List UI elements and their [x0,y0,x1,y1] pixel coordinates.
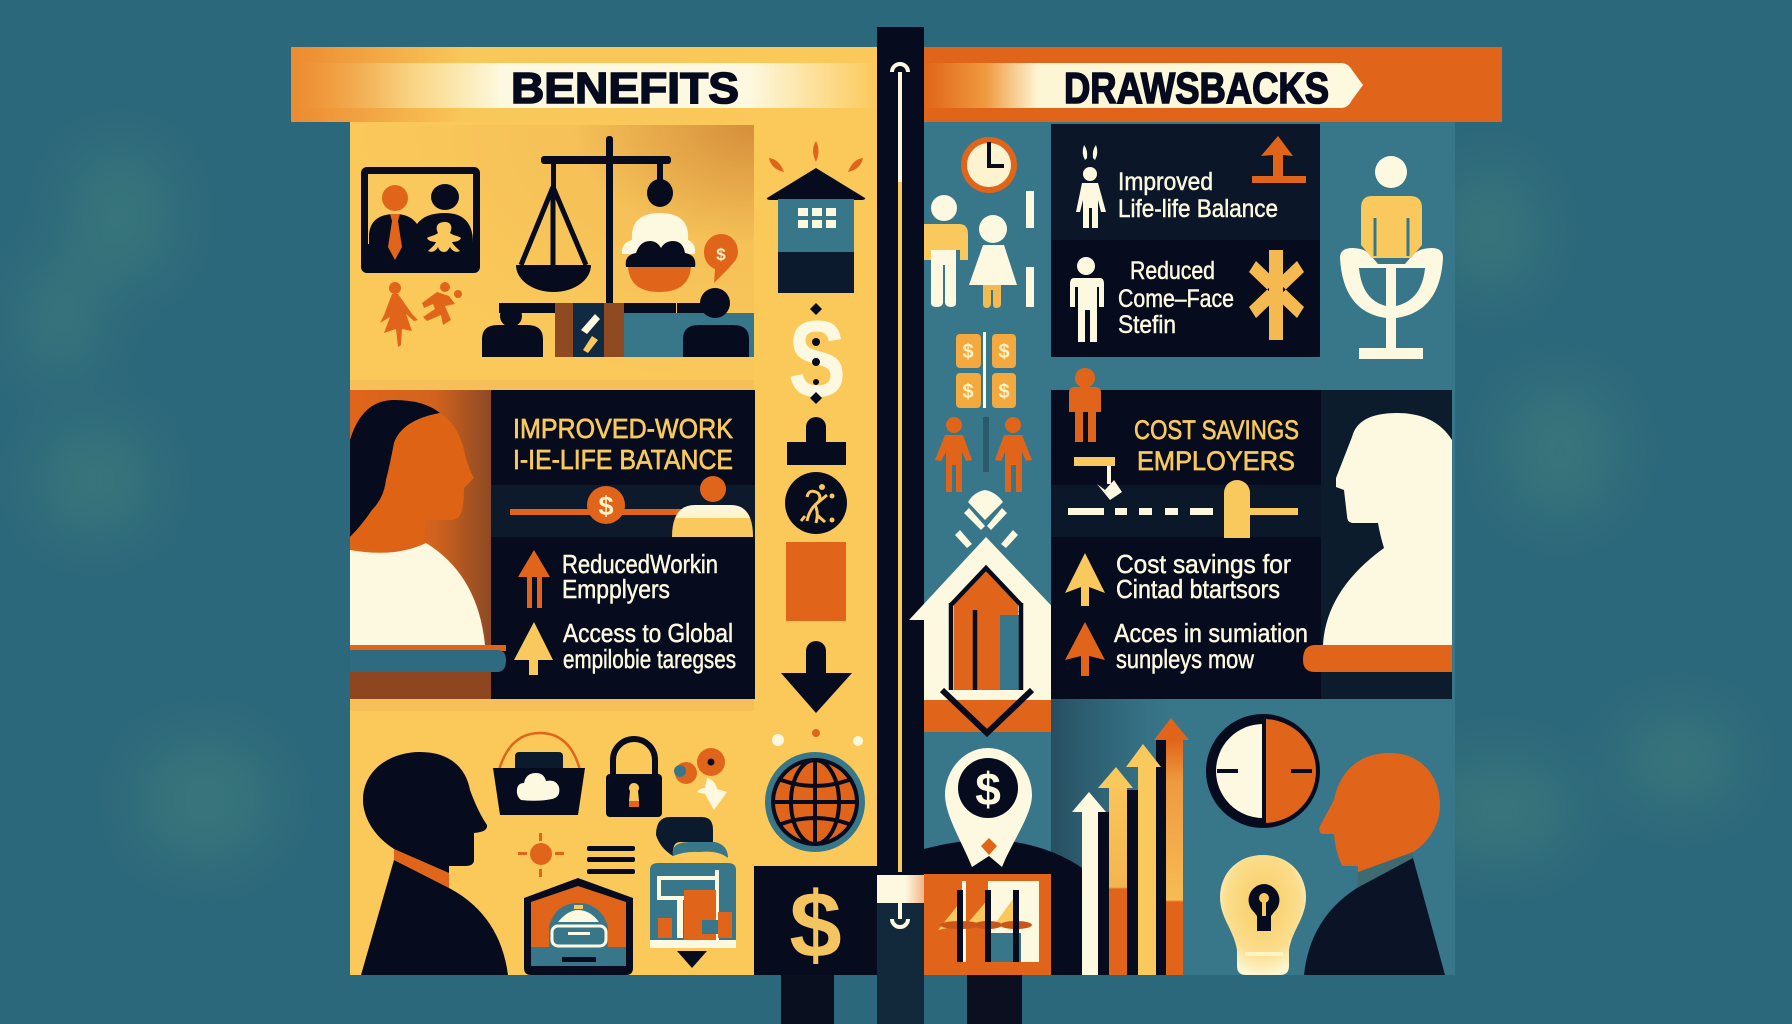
header: drawbacks: DRAWSBACKS [1064,64,1329,113]
icon: balance scale [516,136,695,306]
header: drawbacks [924,47,1502,122]
panel: benefits [291,47,877,977]
icon: figure on pedestal [1340,156,1443,359]
dark panel: top list [1051,124,1320,357]
icon: orange sliders panel [924,874,1051,975]
item: access to global: Access to Global [563,618,733,648]
illustration: orange profile man [1304,753,1445,975]
icon: stamp [787,417,846,465]
item: access in sumiation [1065,618,1308,676]
icon: man and woman [924,191,1034,308]
item: access in sumiation: sunpleys mow [1116,644,1254,674]
item: reduced face time: Stefin [1118,311,1176,339]
heading: cost savings employers: EMPLOYERS [1137,446,1295,476]
icon: globe [765,729,865,852]
icon: chevron marks [955,490,1018,548]
icon: dashed slider [1068,457,1298,538]
icon: gears and arrow [674,748,727,810]
icon: balance slider [510,476,753,537]
icon: balance slider: $ [598,491,614,521]
icon: house with arrows [909,537,1065,733]
dark panel: work-life benefits [350,390,755,699]
item: improved life balance: Life-life Balance [1118,195,1278,223]
heading: improved work life balance: IMPROVED-WORK [513,413,733,444]
icon: dollar tags: $ [998,341,1010,363]
item: improved life balance [1076,145,1278,228]
icon: yellow asterisk [1249,250,1304,340]
icon: dollar tags: $ [962,341,974,363]
icon: location pin [704,234,738,283]
icon: circle with figure [785,472,847,534]
icon: dollar tags: $ [962,381,974,403]
text panel [491,390,755,699]
icon: dollar with dots: S [788,298,846,419]
chart: rising arrows [1051,718,1189,975]
illustration: man silhouette [361,752,508,975]
heading: improved work life balance: I-IE-LIFE BATANCE [513,444,733,475]
icon: down arrow [781,641,852,713]
item: reduced work: ReducedWorkin [562,549,718,579]
icon: half pie chart [1211,719,1316,823]
item: reduced work [518,549,718,608]
icon: sun [518,833,564,877]
icon: two orange figures [935,417,1032,492]
item: cost savings: Cintad btartsors [1116,574,1280,604]
icon: menu lines [587,846,635,874]
item: improved life balance: Improved [1118,168,1213,196]
icon: basket with cloud [493,733,585,815]
icon: dollar location pin with suit [924,748,1085,975]
drawbacks panel background [924,122,1455,975]
icon: home office [767,141,865,293]
orange block [786,542,846,621]
item: reduced face time: Reduced [1130,257,1215,285]
item: access to global: empilobie taregses [563,644,736,674]
item: reduced face time: Come–Face [1118,285,1234,313]
icon: family figures [380,282,462,347]
illustration: desk workers [482,288,754,357]
illustration: cream profile [1303,413,1452,672]
item: reduced work: Empplyers [562,574,670,604]
heading: cost savings employers: COST SAVINGS [1134,415,1299,445]
dark panel: cost savings [1051,368,1452,699]
central pole [781,27,1022,1024]
item: cost savings: Cost savings for [1116,549,1291,579]
icon: clock [961,137,1017,193]
orange portrait [350,390,506,699]
icon: orange up arrow [1252,136,1306,183]
icon: orange figure [1069,368,1101,442]
dollar tile: $ [789,872,842,977]
header: benefits [291,47,877,122]
icon: location pin: $ [716,245,726,264]
icon: light bulb [1220,855,1306,975]
icon: city building chart [650,863,736,968]
benefits panel background [350,122,877,975]
panel: drawbacks [909,47,1502,975]
item: access in sumiation: Acces in sumiation [1114,618,1308,648]
icon: garage with car [524,878,633,975]
item: reduced face time [1070,257,1234,342]
icon: speech bubbles [656,817,728,858]
column: home and money icons [754,141,877,977]
icon: dollar tags [956,332,1016,408]
dollar tile [754,866,877,977]
heading: cost savings employers [1134,415,1299,476]
item: access to global [514,618,736,675]
icon: dollar location pin with suit: $ [975,763,1001,815]
heading: improved work life balance [513,413,733,475]
icon: padlock [606,739,662,817]
item: cost savings [1065,549,1291,606]
icon: video call [361,167,480,273]
header: benefits: BENEFITS [511,64,739,113]
icon: dollar tags: $ [998,381,1010,403]
